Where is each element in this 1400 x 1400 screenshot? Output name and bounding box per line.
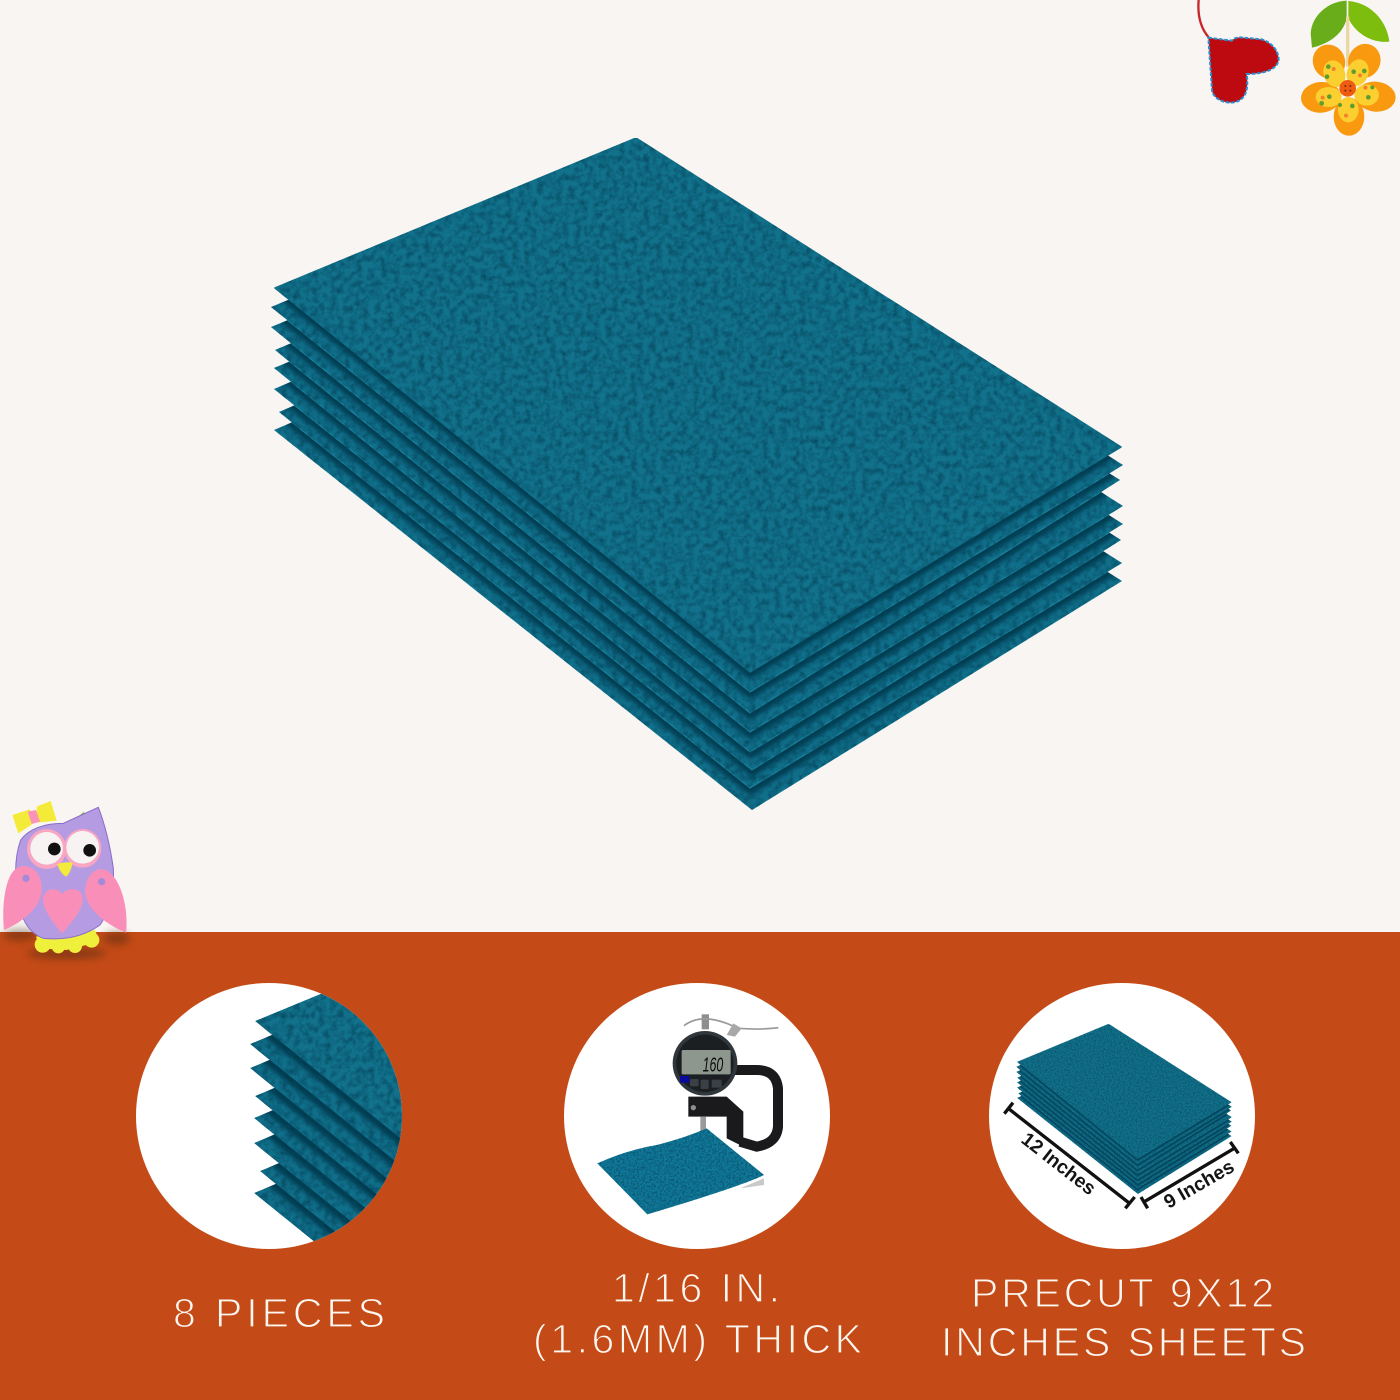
caption: sheet size xyxy=(941,1270,1306,1365)
gauge display reading xyxy=(682,1050,731,1076)
icon: red felt heart xyxy=(1198,0,1279,103)
caption: thickness xyxy=(533,1265,862,1362)
circle: thickness gauge xyxy=(564,983,830,1249)
thickness gauge frame xyxy=(673,1014,778,1147)
owl heart xyxy=(43,889,83,933)
owl beak xyxy=(57,862,73,877)
decoration: purple felt owl xyxy=(3,801,130,959)
caption: 8 pieces: 8 PIECES xyxy=(173,1290,385,1336)
gauge display reading: 160 xyxy=(703,1054,723,1076)
main product image: stack of teal felt sheets xyxy=(271,138,1123,810)
felt sample under gauge xyxy=(597,1128,764,1214)
caption: thickness: 1/16 IN. xyxy=(612,1265,780,1311)
owl body xyxy=(16,807,113,939)
circle: 8 pieces close-up xyxy=(136,983,402,1249)
small felt stack xyxy=(1016,1024,1232,1194)
dimension: 12 inches: 12 Inches xyxy=(1017,1129,1099,1200)
decoration: red felt heart and orange felt flower xyxy=(1198,0,1397,136)
caption: sheet size: PRECUT 9X12 xyxy=(971,1270,1274,1316)
owl eyes xyxy=(27,829,101,869)
dimension: 12 inches xyxy=(1004,1103,1135,1208)
caption: sheet size: INCHES SHEETS xyxy=(941,1319,1306,1365)
dimension: 9 inches: 9 Inches xyxy=(1161,1156,1238,1213)
owl feet xyxy=(35,930,99,953)
bottom orange panel xyxy=(0,932,1400,1400)
caption: thickness: (1.6MM) THICK xyxy=(533,1316,862,1362)
dimension: 9 inches xyxy=(1141,1142,1238,1213)
owl drop shadow xyxy=(3,929,130,959)
circle: 9x12 inches stack with dimensions xyxy=(989,983,1255,1249)
owl bow xyxy=(12,801,57,833)
icon: orange felt flower with green leaves xyxy=(1300,1,1397,136)
owl wings xyxy=(3,866,127,933)
